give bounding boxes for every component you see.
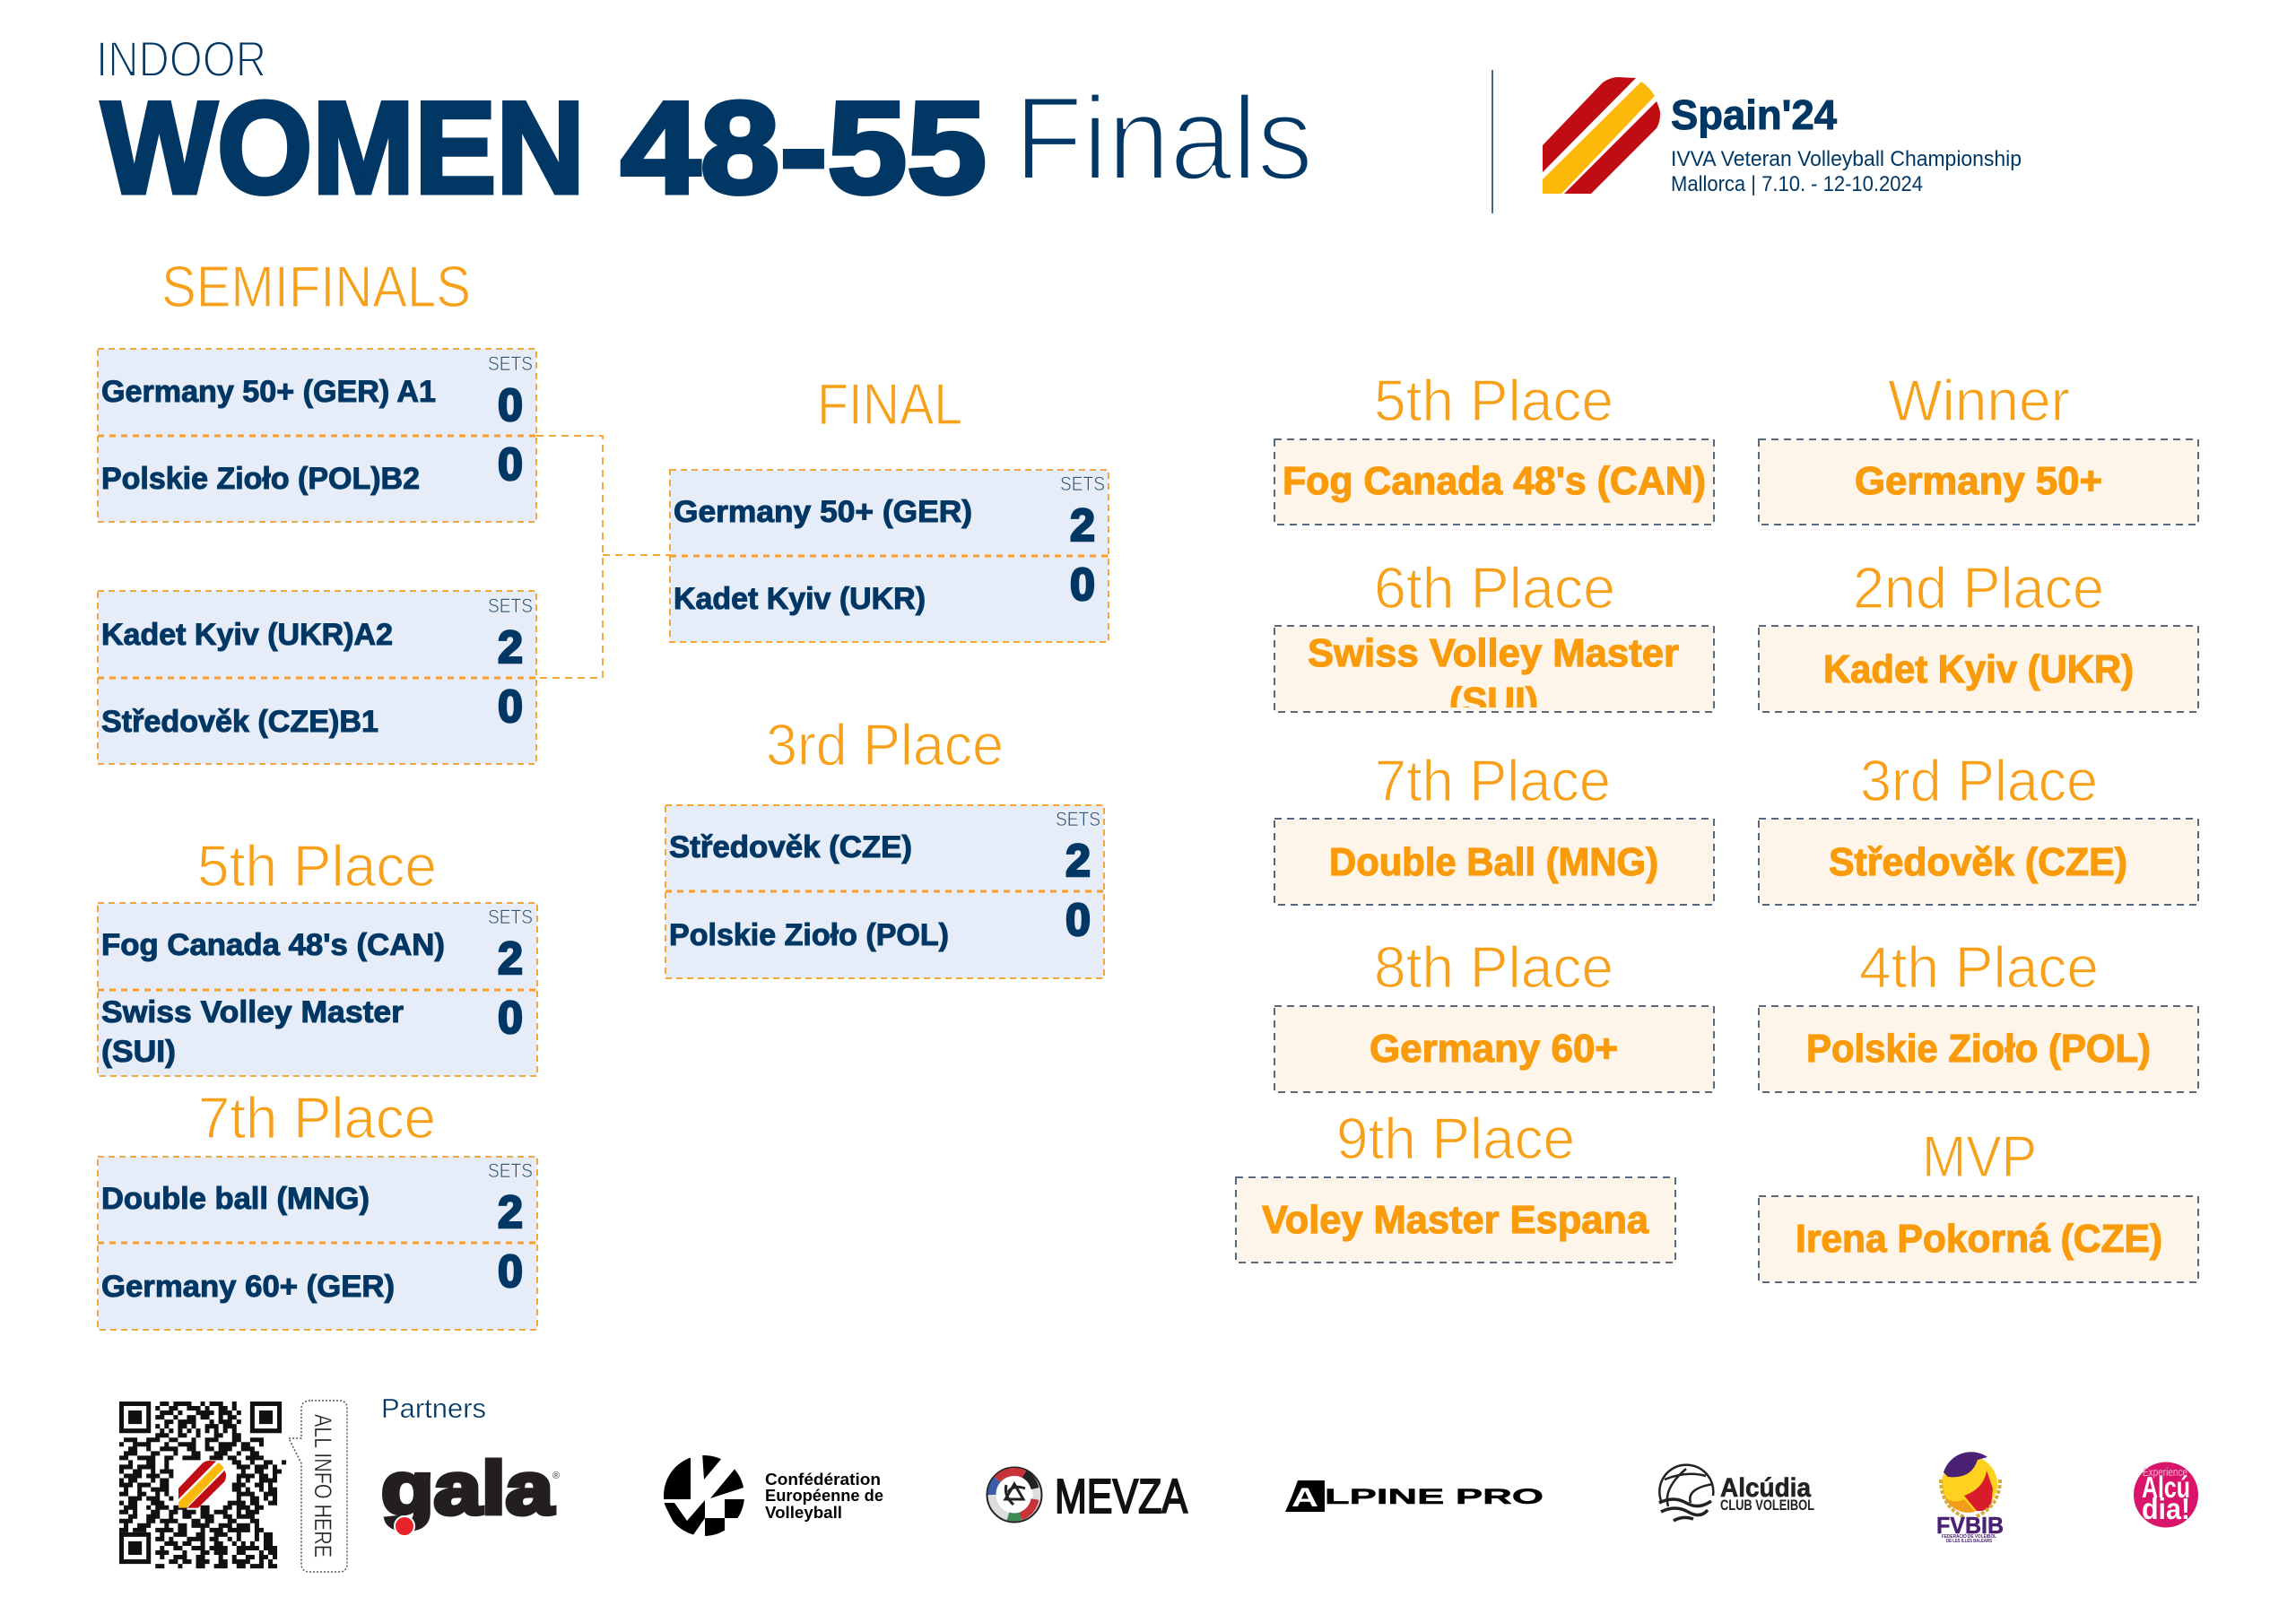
logo: MEVZA <box>987 1468 1187 1523</box>
panel: 5th place match: SETS <box>488 906 533 928</box>
main title: WOMEN <box>101 74 585 221</box>
event logo block: IVVA Veteran Volleyball Championship <box>1671 147 2022 171</box>
icon: FVBIB ball with laurel <box>1941 1452 2000 1517</box>
result: MVP: MVP <box>1922 1124 2037 1189</box>
result: 6th place: 6th Place <box>1374 555 1615 621</box>
result: 3rd place: Středověk (CZE) <box>1829 840 2127 884</box>
result: 7th place <box>1274 748 1714 905</box>
result: 2nd place: Kadet Kyiv (UKR) <box>1823 647 2134 691</box>
panel: 7th place match: 2 <box>498 1186 523 1237</box>
panel: final match: 2 <box>1070 499 1095 551</box>
panel: final match: 0 <box>1070 559 1095 610</box>
result: 8th place <box>1274 934 1714 1092</box>
result: 6th place: (SUI) <box>1449 680 1538 724</box>
icon: volleyball over waves <box>1659 1465 1713 1521</box>
result: 5th place: 5th Place <box>1374 368 1613 433</box>
result: 4th place <box>1759 934 2198 1092</box>
panel: 5th place match: 0 <box>498 992 523 1043</box>
panel: final match: Germany 50+ (GER) <box>674 495 972 529</box>
result: 5th place: Fog Canada 48's (CAN) <box>1283 459 1706 503</box>
logo: gala: ® <box>552 1471 560 1481</box>
panel: 7th place match: SETS <box>488 1159 533 1182</box>
panel: 3rd place match: 2 <box>1065 835 1091 886</box>
panel: 3rd place match: Polskie Zioło (POL) <box>669 918 949 952</box>
panel: 5th place match: (SUI) <box>101 1035 176 1069</box>
result: 4th place: 4th Place <box>1859 934 2099 1000</box>
logo: Alcúdia Club Voleibol: CLUB VOLEIBOL <box>1720 1497 1814 1514</box>
logo: Alcúdia Club Voleibol <box>1659 1465 1814 1521</box>
logo: FVBIB: FEDERACIÓ DE VOLEIBOL <box>1942 1532 1996 1540</box>
result: winner: Winner <box>1888 368 2070 433</box>
event logo block: Spain'24 <box>1671 91 1837 138</box>
heading: Partners: Partners <box>381 1393 486 1424</box>
logo: Alpine Pro: A <box>1292 1483 1318 1513</box>
panel: 3rd place match <box>665 805 1104 978</box>
logo: FVBIB <box>1936 1452 2004 1544</box>
result: 6th place: Swiss Volley Master <box>1308 631 1679 675</box>
result: winner: Germany 50+ <box>1855 459 2102 503</box>
logo: CEV: Volleyball <box>765 1504 842 1522</box>
result: 4th place: Polskie Zioło (POL) <box>1806 1027 2151 1071</box>
panel: semifinal 1: 0 <box>498 438 523 490</box>
logo: Experience Alcúdia: dia! <box>2142 1492 2190 1525</box>
panel: 7th place match: 0 <box>498 1245 523 1297</box>
result: 2nd place: 2nd Place <box>1853 555 2104 621</box>
panel: semifinal 2: 0 <box>498 681 523 732</box>
category label: INDOOR: INDOOR <box>96 30 266 87</box>
panel: 5th place match: Swiss Volley Master <box>101 995 404 1029</box>
panel: semifinal 2 <box>98 591 536 764</box>
result: 8th place: 8th Place <box>1374 934 1613 1000</box>
panel: 3rd place match: Středověk (CZE) <box>669 830 912 864</box>
event logo block: Mallorca | 7.10. - 12-10.2024 <box>1671 172 1923 196</box>
result: MVP: Irena Pokorná (CZE) <box>1796 1217 2162 1261</box>
panel: 7th place match: Germany 60+ (GER) <box>101 1270 395 1304</box>
logo: gala: gala <box>381 1446 554 1530</box>
panel: semifinal 2: 2 <box>498 621 523 673</box>
logo: Experience Alcúdia: Alcú <box>2142 1471 2190 1504</box>
main title: 48-55 <box>621 74 987 221</box>
panel: semifinal 2: SETS <box>488 595 533 617</box>
result: 8th place: Germany 60+ <box>1370 1027 1618 1071</box>
result: 2nd place <box>1759 555 2198 712</box>
panel: semifinal 2: Středověk (CZE)B1 <box>101 705 378 739</box>
logo: Alpine Pro <box>1285 1480 1544 1513</box>
arrow: bracket connector to final <box>536 436 670 678</box>
callout: ALL INFO HERE <box>289 1401 347 1572</box>
result: 9th place: 9th Place <box>1336 1106 1575 1171</box>
logo: CEV: Européenne de <box>765 1487 883 1505</box>
logo: FVBIB: FVBIB <box>1936 1512 2004 1539</box>
icon: CEV emblem <box>664 1453 746 1539</box>
event logo block <box>1492 70 2022 213</box>
icon: Spain flag stripes <box>1543 77 1660 194</box>
result: 9th place <box>1236 1106 1675 1263</box>
result: 3rd place: 3rd Place <box>1860 748 2098 813</box>
result: 7th place: Double Ball (MNG) <box>1329 840 1658 884</box>
panel: semifinal 1: Polskie Zioło (POL)B2 <box>101 462 420 496</box>
icon: QR code <box>119 1404 286 1567</box>
logo: Experience Alcúdia: Experience <box>2143 1465 2187 1479</box>
panel: semifinal 1 <box>98 349 536 522</box>
icon: MEVZA flag ball <box>987 1468 1041 1522</box>
panel: 3rd place match: SETS <box>1056 808 1100 830</box>
subtitle: Finals: Finals <box>1014 73 1313 205</box>
panel: semifinal 1: Germany 50+ (GER) A1 <box>101 375 436 409</box>
callout: ALL INFO HERE: ALL INFO HERE <box>309 1414 336 1558</box>
result: 6th place <box>1274 567 1715 713</box>
heading: FINAL: FINAL <box>817 371 962 437</box>
result: 9th place: Voley Master Espana <box>1262 1198 1649 1242</box>
panel: 5th place match <box>98 903 537 1076</box>
heading: 7th Place match: 7th Place <box>198 1085 436 1150</box>
panel: final match: SETS <box>1060 473 1105 495</box>
result: MVP <box>1759 1124 2198 1282</box>
result: 5th place <box>1274 368 1714 525</box>
panel: 5th place match: Fog Canada 48's (CAN) <box>101 928 445 962</box>
heading: SEMIFINALS: SEMIFINALS <box>161 254 471 319</box>
panel: 5th place match: 2 <box>498 933 523 984</box>
logo: CEV: Confédération <box>765 1471 881 1488</box>
panel: semifinal 1: 0 <box>498 379 523 430</box>
panel: final match: Kadet Kyiv (UKR) <box>674 582 926 616</box>
result: 3rd place <box>1759 748 2198 905</box>
logo: Alcúdia Club Voleibol: Alcúdia <box>1720 1473 1811 1503</box>
logo: FVBIB: DE LES ILLES BALEARS <box>1946 1539 1993 1544</box>
panel: 7th place match <box>98 1157 537 1330</box>
main title <box>101 74 987 221</box>
panel: final match <box>670 470 1109 642</box>
panel: semifinal 1: SETS <box>488 352 533 375</box>
logo: Experience Alcúdia <box>2134 1462 2198 1528</box>
logo: MEVZA: MEVZA <box>1055 1470 1187 1523</box>
heading: 3rd Place match: 3rd Place <box>766 712 1004 777</box>
icon: QR centre logo <box>178 1461 226 1508</box>
heading: 5th Place match: 5th Place <box>197 833 437 898</box>
panel: semifinal 2: Kadet Kyiv (UKR)A2 <box>101 618 393 652</box>
logo: Alpine Pro: LPINE PRO <box>1325 1485 1544 1509</box>
logo: CEV <box>664 1453 883 1539</box>
result: winner <box>1759 368 2198 525</box>
panel: 3rd place match: 0 <box>1065 894 1091 945</box>
result: 7th place: 7th Place <box>1375 748 1611 813</box>
panel: 7th place match: Double ball (MNG) <box>101 1182 370 1216</box>
